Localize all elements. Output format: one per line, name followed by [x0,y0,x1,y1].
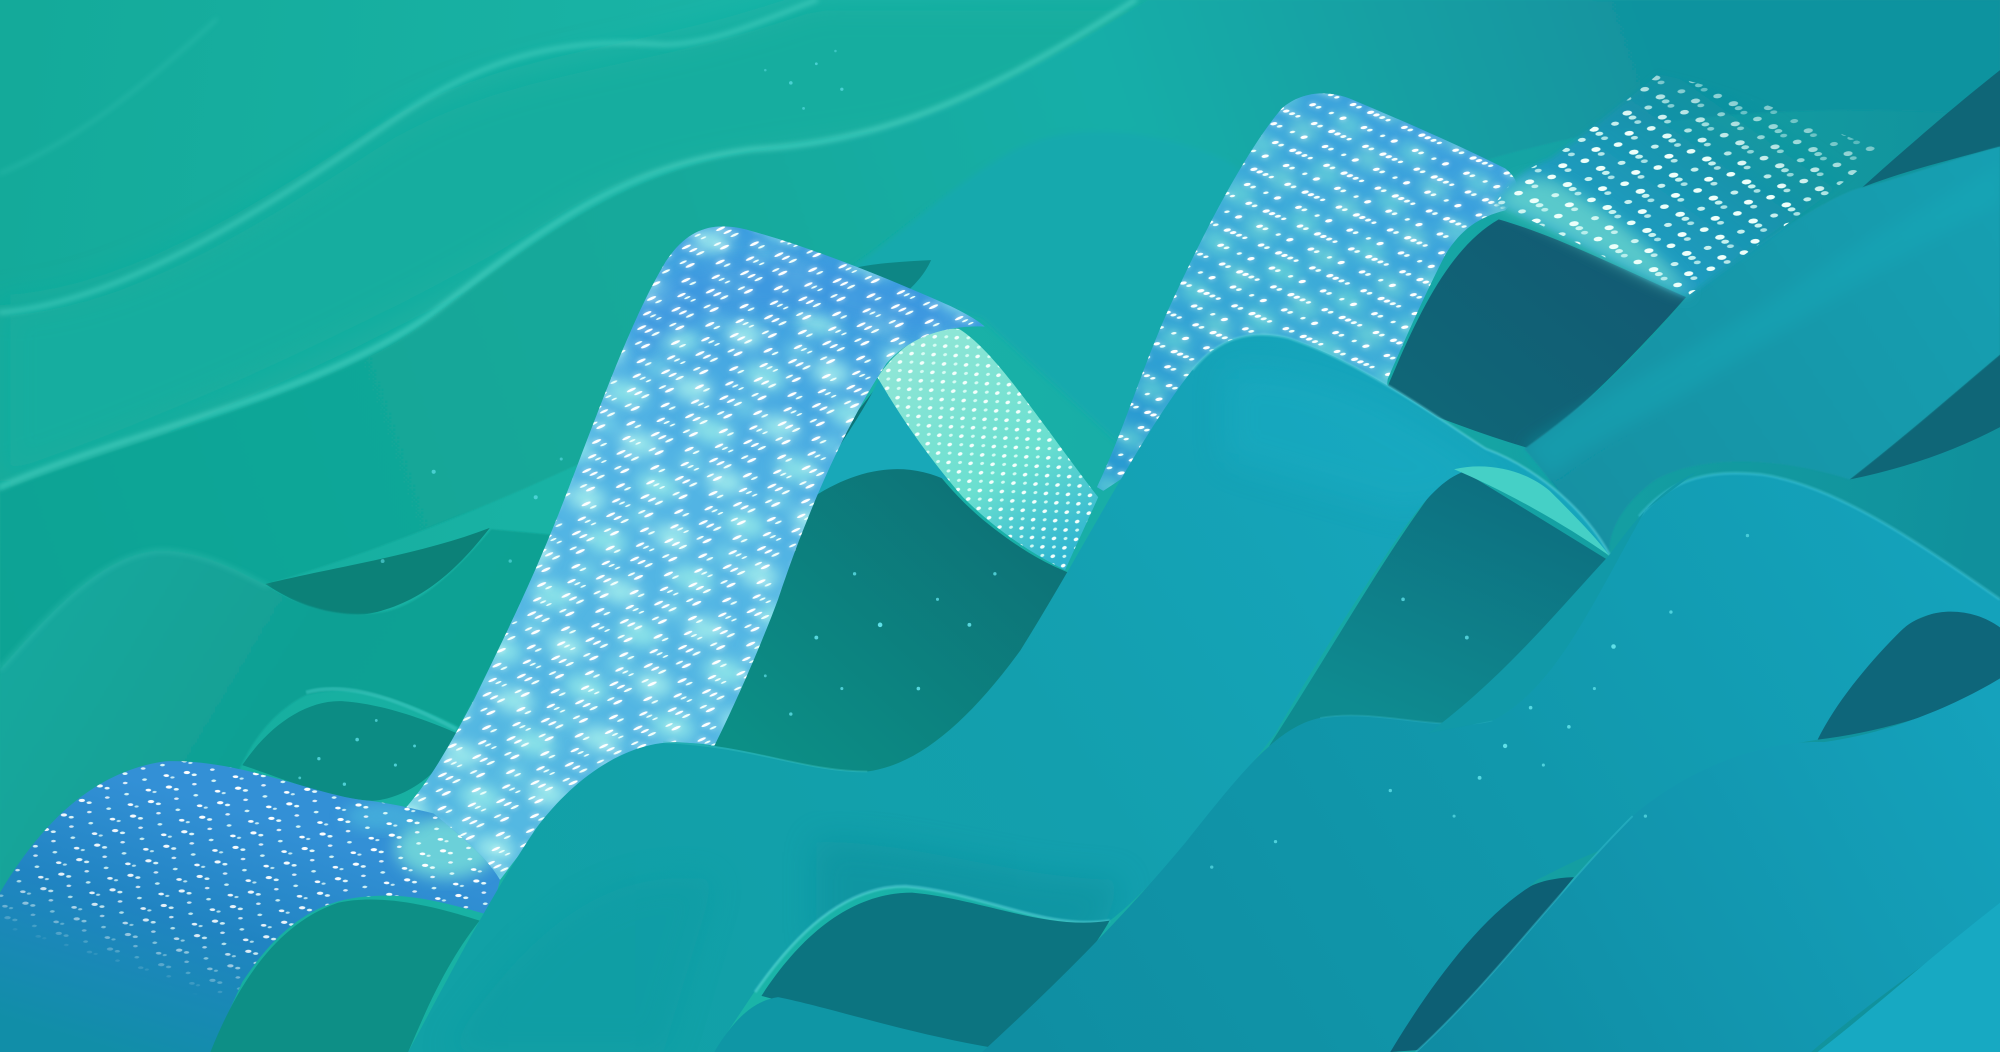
faint light lines [0,0,1135,487]
dark gap: arch interior [702,383,1071,787]
right band between waves [1429,472,1696,733]
rim light: hole edge [306,689,457,729]
dark gaps: far right [1818,70,2000,740]
back waves [0,0,2000,676]
arch back wall [804,363,950,504]
dark gap: bottom right sliver [1390,877,1574,1052]
front wave two [982,473,2000,1052]
right upper bands [1524,147,2000,555]
ribbon: far right dotted tail [1490,76,1875,300]
front wave one [408,335,1610,1052]
ribbon: main glowing face [406,226,984,880]
dark gap: upper right square [1384,219,1686,449]
left back wave surface [0,529,561,893]
drifting light particles [298,50,1749,869]
bottom centre sliver [714,997,995,1052]
dark gap: right arch interior [1269,465,1610,746]
lit underside: right arch [1454,466,1610,556]
front wave three [1416,678,2000,1052]
ribbon: lower left glowing face [0,752,510,1052]
dark gap: left back fold [265,528,490,615]
dark gap: lower left bottom [210,899,480,1052]
dark gap: lower left hole [242,701,457,801]
dark gap: bottom centre [761,893,1110,1048]
ribbon: lit underside strip [878,328,1098,570]
dark gap: top centre fold [855,260,931,291]
ribbon: upper right glowing face [1097,93,1516,491]
rim light: left back wave [0,551,268,669]
